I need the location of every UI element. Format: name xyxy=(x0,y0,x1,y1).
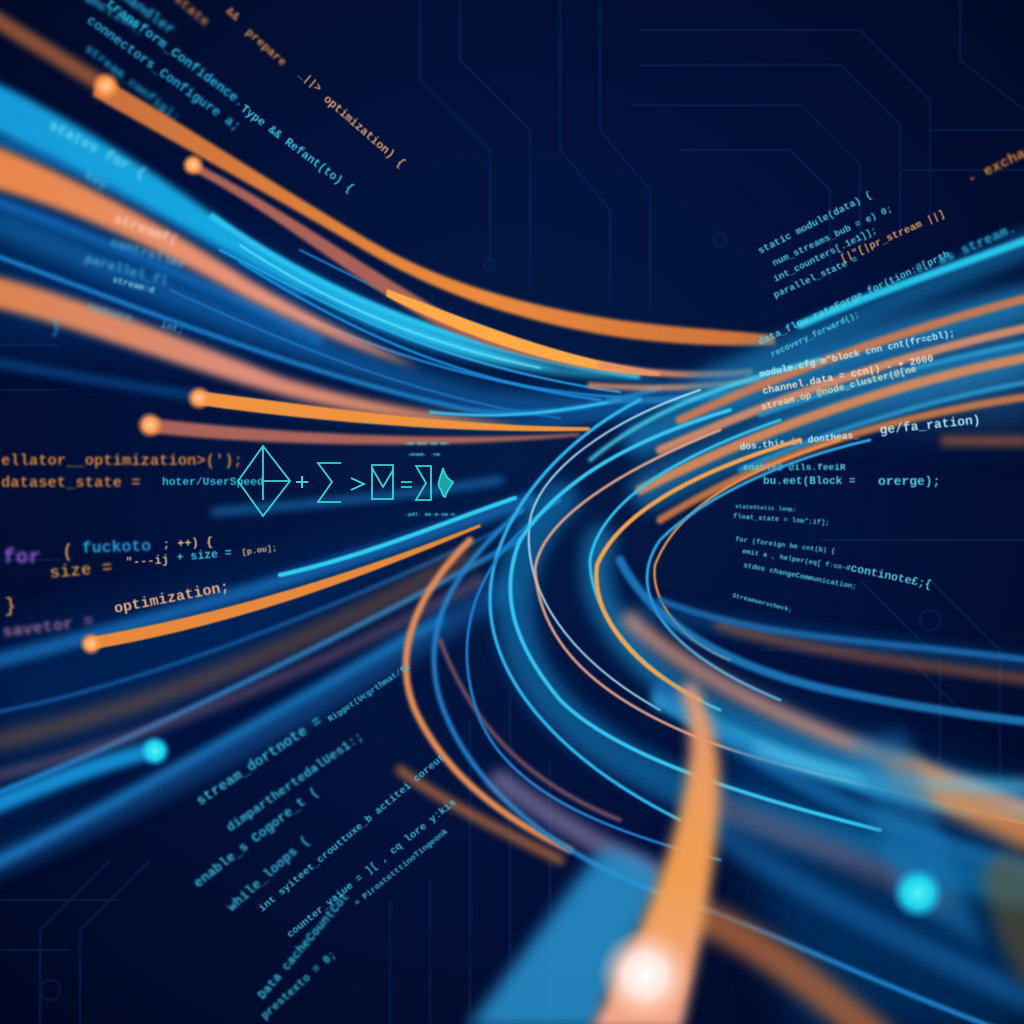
icon: diamond with cross xyxy=(238,446,290,516)
tapered streak: dot at 90,643 xyxy=(90,524,481,650)
code over right streak fan: dos.this in dontheas_ xyxy=(739,429,860,453)
text block: top-left code xyxy=(74,0,407,196)
text block: top-left code: optimization) { xyxy=(320,93,407,171)
right code block: lower: enable@ @ils.feeiR xyxy=(743,462,846,473)
code block: bottom centre: counter_vaiue = ][ , cq lore y:kis xyxy=(285,797,459,941)
right code block: lower: stateStatic loop; xyxy=(735,503,796,513)
text block: top-left code: stream_config); xyxy=(82,41,183,125)
blurred code over left streaks: streamf( xyxy=(111,212,180,250)
blurred code over left streaks: states for { xyxy=(46,117,149,183)
right code block: upper: [|"[|pr_stream ||] xyxy=(839,209,947,266)
code block: bottom centre: enable_s Cogore_t ( xyxy=(192,785,322,892)
text block: top-left code: transform_Confidence. xyxy=(102,0,247,111)
blurred code over left streaks: } xyxy=(50,318,61,338)
code over right streak fan: ge/fa_ration) xyxy=(879,412,981,438)
blurred code over left streaks: key xyxy=(82,168,110,193)
equals sign xyxy=(401,482,412,487)
code block: bottom centre: while_loops ( xyxy=(225,834,314,916)
small formula annotations: -pdl· mn·m-nm·n xyxy=(405,511,455,518)
blurred code over left streaks: int; xyxy=(159,319,185,337)
blurred code over left streaks: stream:d xyxy=(111,275,156,296)
text block: top-left code: prepare xyxy=(242,26,289,70)
code block: left main: ellator__optimization>('); xyxy=(1,452,243,470)
code over right streak fan xyxy=(739,328,981,453)
text block: top-left code: && xyxy=(222,4,243,25)
small formula annotations: -mnmm- ·nm xyxy=(407,451,441,458)
right code block: lower: bu.eet(Block = xyxy=(763,476,856,488)
foreground orange band xyxy=(590,680,720,1024)
blurred code over left streaks: parallel_fl xyxy=(83,251,170,290)
right code block: upper xyxy=(756,134,1024,360)
icon: second sigma xyxy=(416,466,431,500)
code over right streak fan: module.cfg m"block cnn cnt(fr=cbl); xyxy=(758,328,956,380)
code over right streak fan: stream.op @node_cluster(@[ne xyxy=(760,364,918,413)
right streak fan xyxy=(590,235,1024,520)
small formula annotations xyxy=(404,440,455,518)
code block: left main: } xyxy=(4,596,16,619)
text block: top-left code: Type && Refant(to) { xyxy=(238,103,356,196)
swirl glow underlay xyxy=(515,500,1024,890)
tapered streak: lower orange xyxy=(0,272,520,424)
code block: left main: + size = xyxy=(176,547,232,565)
text block: top-left code: _||> xyxy=(295,68,324,95)
right code block: lower: stdos changeCommunication; xyxy=(742,562,857,592)
right code block: upper: data_flow_rateForge_for(tion:@[prth xyxy=(757,249,952,349)
blurred code over left streaks: controller xyxy=(109,235,188,273)
code block: left main: ; ++) { xyxy=(162,535,214,552)
glow: white bloom at band base xyxy=(597,927,693,1023)
blue wedge bottom right xyxy=(850,730,985,950)
right code block: upper: parallel_state = xyxy=(772,253,860,301)
code block: bottom centre: Rigget(Ucgrthmat/fp xyxy=(326,662,412,724)
icon: boxed check xyxy=(372,465,393,499)
code block: bottom centre: Data cacheCountCot xyxy=(255,890,353,1003)
right code block: lower xyxy=(732,462,940,614)
icon: sigma xyxy=(318,463,341,502)
plus sign xyxy=(296,476,308,488)
code block: bottom centre: dimparthertedalUes1:; xyxy=(224,729,366,835)
code block: left main: fuckoto xyxy=(82,537,152,558)
right code block: lower: for (foreign be cnt(b) { xyxy=(735,536,836,556)
tapered streak: second dot xyxy=(190,160,700,376)
code block: left main: size = xyxy=(49,559,113,584)
tapered streak: dot at 198,398 xyxy=(198,391,590,431)
right code block: lower: orerge); xyxy=(878,474,940,489)
code block: left main: optimization; xyxy=(113,579,231,618)
code block: left main: ( xyxy=(62,541,73,563)
code block: left main: [p.ou]; xyxy=(241,543,278,558)
code block: left main: savetor = xyxy=(1,613,95,643)
code block: left main xyxy=(1,452,278,643)
code block: left main: dataset_state = xyxy=(1,474,141,492)
code block: left main: "---ij xyxy=(125,553,169,570)
glow: cyan node bottom right xyxy=(891,866,945,920)
right code block: upper: static module(data) { xyxy=(756,190,874,258)
right code block: upper: num_streams_bub = e) 0; xyxy=(771,203,894,269)
right code block: lower: continote£;{ xyxy=(849,562,933,592)
right code block: upper: as stream. xyxy=(936,221,1019,270)
foreground blue band xyxy=(465,850,665,1024)
tapered streak: bright orange tail xyxy=(386,289,660,376)
cyan core line xyxy=(210,215,640,376)
code block: bottom centre: stream_dortnote = xyxy=(194,714,325,810)
math formula glyphs xyxy=(238,446,453,516)
code block: left main: for xyxy=(3,547,41,570)
right code block: upper: recovery_forward(); xyxy=(769,310,861,360)
code block: bottom centre xyxy=(192,662,459,1023)
swirling arcs xyxy=(400,390,1024,1024)
blurred code over left streaks xyxy=(46,117,188,338)
right code block: lower: Streamservcheck; xyxy=(732,592,793,614)
code block: bottom centre: prestexto = 0; xyxy=(259,949,339,1023)
tapered streak: wide cyan xyxy=(0,75,660,378)
code block: bottom centre: = PirostetttinoTingeonk xyxy=(353,827,450,908)
code over right streak fan: channel.data = ccn|) - + 2000 xyxy=(761,353,935,398)
glowing node dots: upper left xyxy=(91,71,212,439)
blurred code over left streaks: return xyxy=(85,299,134,327)
small formula annotations: -mm·mon·nm·nn- xyxy=(404,440,450,447)
code block: left main: hoter/UserSpeed xyxy=(162,477,264,489)
code block: bottom centre: int syiteet_crouttuxe_b actitei coreut xyxy=(257,752,448,915)
icon: small ornament xyxy=(439,468,453,497)
left streak lines: upper fan xyxy=(0,10,680,426)
tapered streak: dot at 150,425 xyxy=(150,418,580,445)
tapered streak: wide orange xyxy=(0,140,420,368)
right code block: upper: int_counters[.1e1]]; xyxy=(771,225,879,285)
right code block: lower: float_state = lom";if]; xyxy=(733,513,830,528)
greater-than sign xyxy=(351,478,364,490)
right code block: lower: emit a , helper(eq[ f:co-d xyxy=(742,548,851,573)
text block: top-left code: connectors_Configure a; xyxy=(83,14,243,136)
tapered streak: top orange xyxy=(92,76,775,346)
left streak lines: lower fan xyxy=(0,480,530,870)
glowing node dots: lower left xyxy=(79,632,171,767)
thin cyan accent xyxy=(240,245,620,415)
